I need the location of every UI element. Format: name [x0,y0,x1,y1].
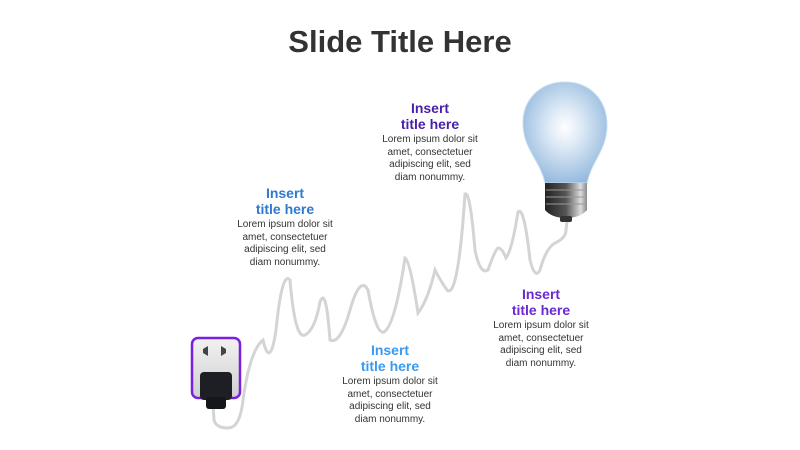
text block 3: Lorem ipsum dolor sit [382,134,478,145]
text block 4: adipiscing elit, sed [500,345,582,356]
text block 2: amet, consectetuer [347,388,433,400]
text block 4: Insert [522,286,560,302]
icon: light bulb [523,82,607,222]
icon: socket [192,338,240,409]
title: Slide Title Here [288,24,512,59]
text block 2: Insert [371,342,409,358]
text block 4: Lorem ipsum dolor sit [493,320,589,331]
text block 1: Lorem ipsum dolor sit [237,219,333,230]
wire [213,194,567,428]
text block 3: adipiscing elit, sed [389,159,471,170]
text block 3 [382,100,478,182]
text block 2 [342,342,438,424]
text block 3: title here [401,116,459,132]
text block 1: amet, consectetuer [242,232,328,242]
text block 2: title here [361,358,419,374]
text block 2: diam nonummy. [355,414,425,424]
text block 1: adipiscing elit, sed [244,244,326,255]
text block 4: title here [512,302,570,318]
text block 4 [493,286,589,368]
text block 3: diam nonummy. [395,172,465,182]
text block 4: amet, consectetuer [498,332,584,344]
text block 2: Lorem ipsum dolor sit [342,376,438,387]
text block 1: diam nonummy. [250,256,320,268]
text block 1 [237,185,333,268]
text block 4: diam nonummy. [506,358,576,368]
text block 1: Insert [266,185,304,201]
text block 3: Insert [411,100,449,116]
text block 3: amet, consectetuer [387,146,473,158]
text block 1: title here [256,201,314,217]
text block 2: adipiscing elit, sed [349,401,431,412]
